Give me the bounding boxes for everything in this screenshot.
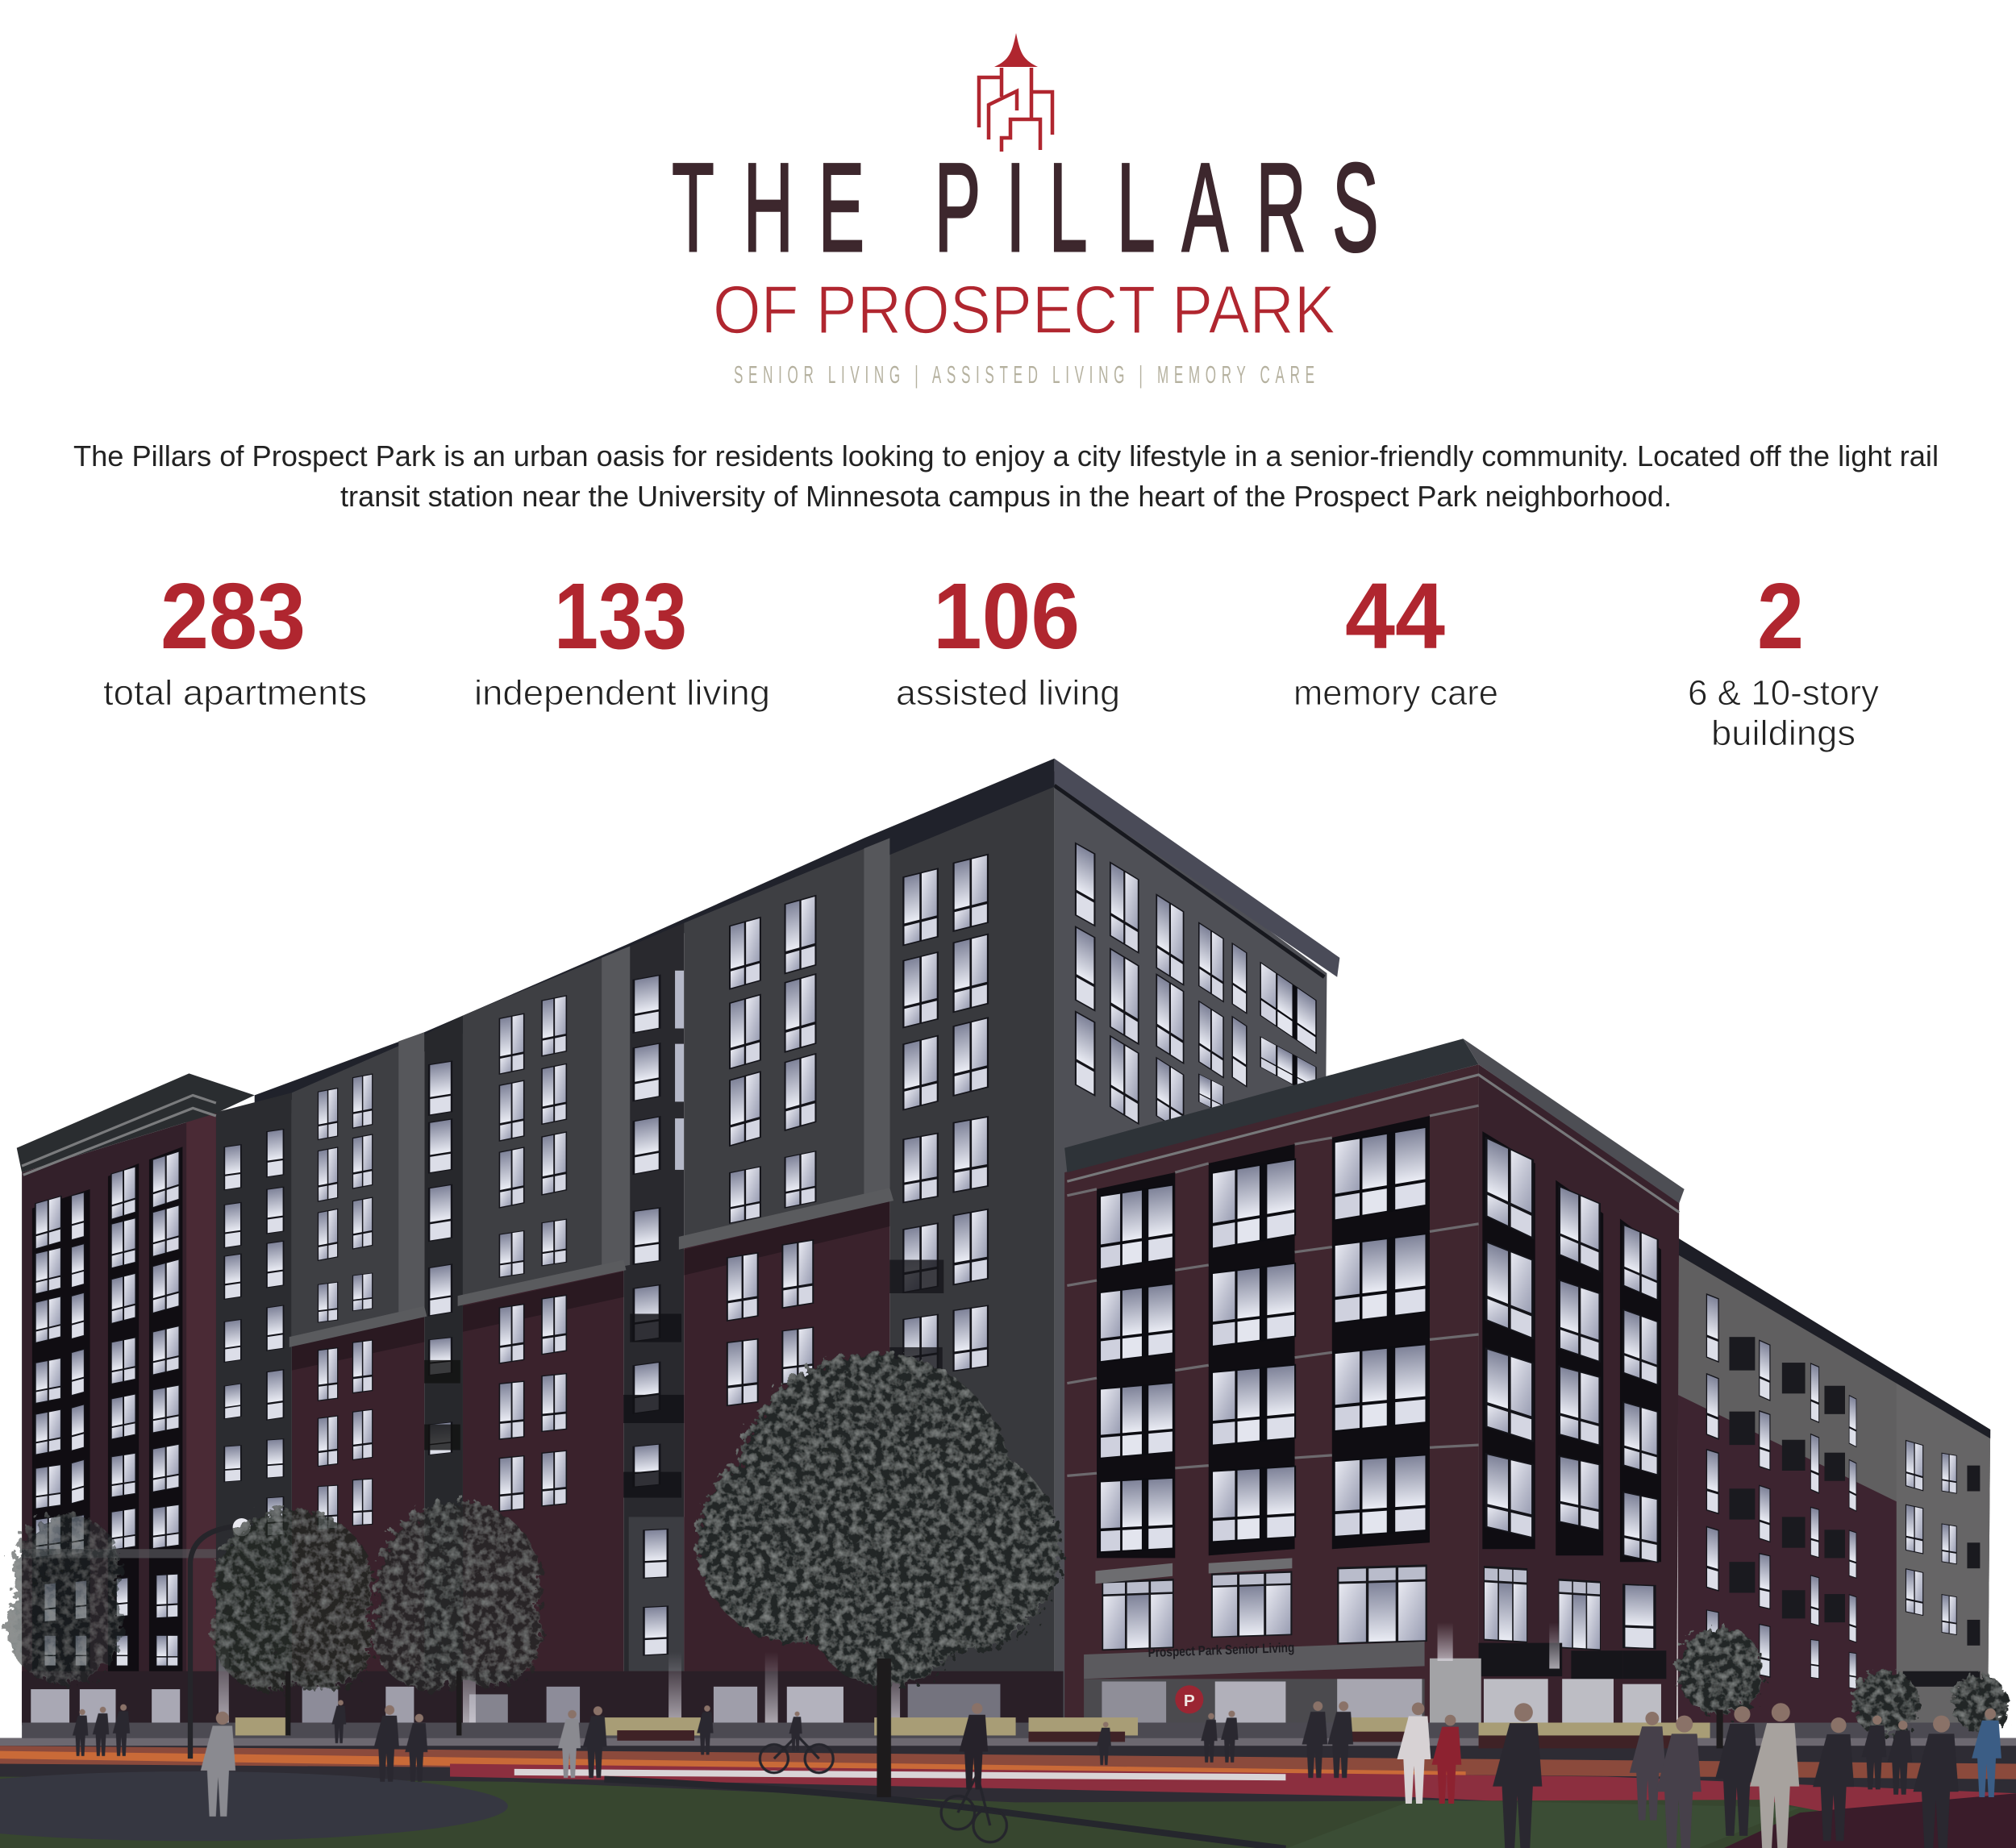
bay E	[458, 946, 630, 1722]
tagline: SENIOR LIVING | ASSISTED LIVING | MEMORY CARE	[734, 361, 1314, 389]
intro text block	[73, 439, 1939, 513]
stat: buildings: buildings	[1711, 714, 1856, 753]
tree: central large	[697, 1352, 1060, 1687]
storefront glazing	[1095, 1558, 1656, 1650]
tree: left small 1	[212, 1508, 373, 1691]
right greige building	[1678, 1238, 1990, 1730]
stat: assisted living	[896, 564, 1120, 713]
stat: total apartments: 283	[160, 564, 306, 668]
tower recess H	[868, 772, 1054, 1722]
bay C	[289, 1032, 427, 1722]
left brick tower	[17, 1073, 255, 1722]
logo	[672, 33, 1378, 389]
stat: memory care: 44	[1345, 564, 1445, 668]
building illustration	[0, 759, 2016, 1848]
tower right facade	[1054, 759, 1339, 1722]
ground: sidewalk, road, lawn and path	[0, 1722, 2016, 1848]
stat: independent living	[474, 564, 770, 713]
sign: prospect park senior living: Prospect Park Senior Living	[1148, 1640, 1295, 1660]
recess F	[599, 923, 684, 1722]
entry level: P	[1184, 1692, 1195, 1710]
ground-floor storefronts of tower	[22, 1622, 1064, 1725]
stats row	[103, 564, 1879, 753]
cyclists	[760, 1703, 1006, 1842]
stat: buildings: 2	[1757, 564, 1804, 668]
front windows	[1067, 1105, 1479, 1558]
title: the pillars: THE PILLARS	[672, 137, 1378, 277]
stat: assisted living: assisted living	[896, 673, 1120, 713]
tree: far left	[6, 1514, 122, 1684]
entry level	[1084, 1622, 1661, 1725]
stat: assisted living: 106	[933, 564, 1080, 668]
subtitle: of prospect park: OF PROSPECT PARK	[713, 272, 1335, 348]
front six-story brick building	[1064, 1038, 1685, 1725]
trees	[6, 1352, 2008, 1737]
tree trunks	[285, 1659, 1722, 1797]
stat: buildings: 6 & 10-story	[1688, 673, 1879, 713]
roof line of tower	[255, 759, 1054, 1113]
tree: left small 2	[373, 1501, 543, 1691]
people	[73, 1700, 2001, 1848]
stat: memory care: memory care	[1293, 673, 1498, 713]
stat: buildings	[1688, 564, 1879, 753]
stat: independent living: independent living	[474, 673, 770, 713]
tree: right small	[1677, 1628, 2008, 1737]
recess B	[212, 1093, 292, 1722]
stat: independent living: 133	[554, 564, 687, 668]
intro text block: transit station near the University of Minnesota campus in the heart of the Prospect Park neighborhood.	[340, 480, 1672, 513]
icon: skyline spire	[979, 33, 1052, 152]
bay G	[679, 839, 893, 1722]
stat: total apartments	[103, 564, 367, 713]
stat: memory care	[1293, 564, 1498, 713]
planting beds	[235, 1717, 1710, 1748]
sign: prospect park senior living	[1084, 1640, 1666, 1679]
intro text block: The Pillars of Prospect Park is an urban oasis for residents looking to enjoy a city lifestyle in a senior-friendly community. Located off the light rail	[73, 439, 1939, 472]
street lamp	[190, 1518, 251, 1759]
recess D	[396, 1016, 463, 1722]
stat: total apartments: total apartments	[103, 673, 367, 713]
side windows	[1482, 1131, 1661, 1563]
